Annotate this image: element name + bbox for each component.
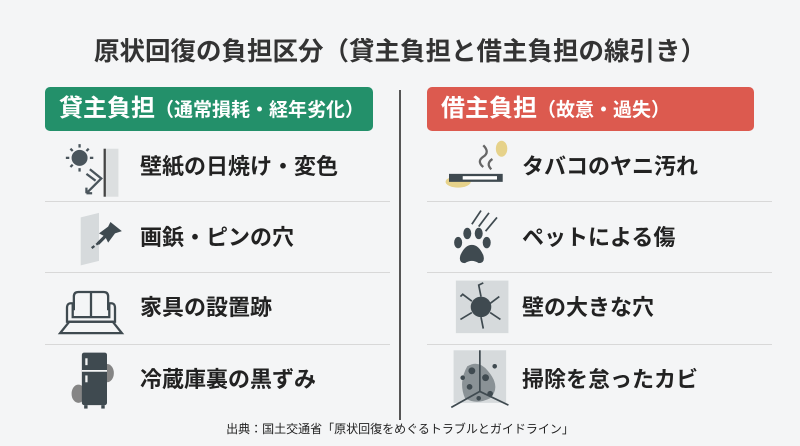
divider bbox=[399, 90, 401, 420]
icon: sun bbox=[66, 144, 118, 197]
footnote: 出典：国土交通省「原状回復をめぐるトラブルとガイドライン」 bbox=[226, 422, 574, 436]
row: mold bbox=[450, 350, 698, 408]
row: furniture bbox=[58, 290, 272, 334]
row: pin holes: 画鋲・ピンの穴 bbox=[140, 225, 294, 250]
row: tobacco bbox=[446, 140, 698, 188]
row: pet bbox=[454, 210, 675, 264]
row: sun fading: 壁紙の日焼け・変色 bbox=[140, 154, 338, 179]
row: pin holes bbox=[80, 213, 294, 266]
header: landlord bbox=[45, 87, 373, 131]
row: sun fading bbox=[66, 144, 338, 197]
row: tobacco: タバコのヤニ汚れ bbox=[522, 154, 698, 179]
icon: sofa bbox=[58, 290, 124, 334]
row: fridge: 冷蔵庫裏の黒ずみ bbox=[140, 367, 316, 392]
row: wall hole: 壁の大きな穴 bbox=[522, 295, 654, 320]
row: pet: ペットによる傷 bbox=[522, 225, 675, 250]
icon: cigarette bbox=[446, 140, 508, 188]
header: tenant: 借主負担（故意・過失） bbox=[441, 95, 670, 122]
icon: fridge bbox=[72, 352, 114, 409]
icon: pin bbox=[80, 213, 122, 266]
icon: paw bbox=[454, 210, 498, 264]
title: 原状回復の負担区分（貸主負担と借主負担の線引き） bbox=[94, 38, 706, 66]
icon: mold bbox=[450, 350, 509, 408]
row: furniture: 家具の設置跡 bbox=[140, 295, 272, 320]
icon: hole bbox=[456, 280, 508, 334]
panel: landlord bbox=[45, 87, 390, 409]
header: tenant bbox=[427, 87, 754, 131]
panel: tenant bbox=[427, 87, 772, 408]
row: wall hole bbox=[456, 280, 654, 334]
row: fridge bbox=[72, 352, 316, 409]
header: landlord: 貸主負担（通常損耗・経年劣化） bbox=[59, 95, 364, 122]
row: mold: 掃除を怠ったカビ bbox=[522, 367, 698, 392]
